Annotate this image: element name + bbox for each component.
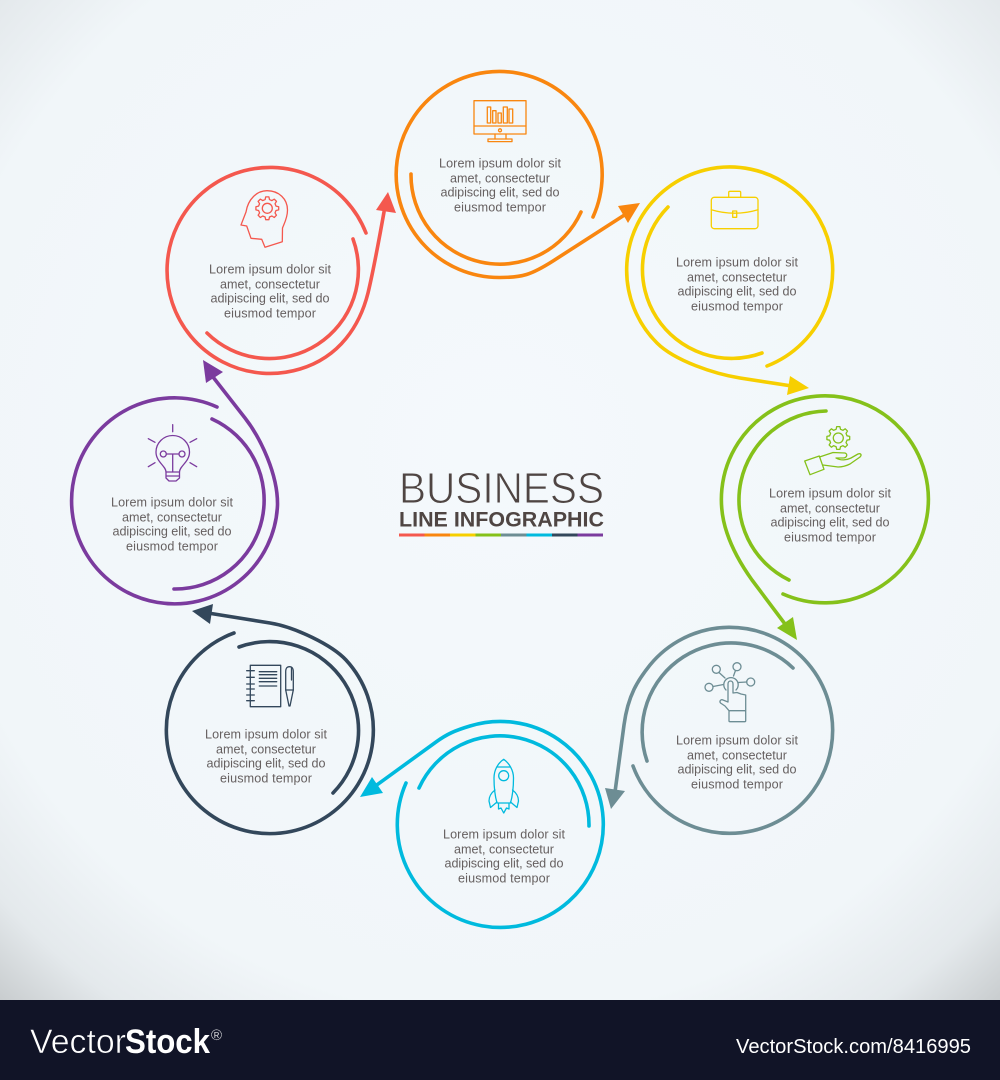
- subheading: LINE INFOGRAPHIC: [399, 508, 604, 532]
- text block: [209, 262, 332, 320]
- text block: amet, consectetur: [687, 270, 787, 284]
- circle and arrow line: [166, 613, 373, 834]
- text block: amet, consectetur: [122, 510, 222, 524]
- text block: [676, 256, 798, 314]
- arrow head: [192, 604, 213, 624]
- text block: Lorem ipsum dolor sit: [111, 496, 234, 510]
- text block: eiusmod tempor: [126, 540, 218, 554]
- arrow head: [787, 376, 809, 395]
- panel: red step: [167, 167, 396, 373]
- circle and arrow line: [615, 627, 833, 833]
- text block: [676, 734, 798, 792]
- text block: adipiscing elit, sed do: [440, 186, 560, 200]
- text block: eiusmod tempor: [220, 772, 312, 786]
- circle and arrow line: [721, 396, 928, 628]
- text block: amet, consectetur: [454, 842, 554, 856]
- text block: adipiscing elit, sed do: [112, 524, 232, 538]
- icon: head with gear: [241, 191, 288, 247]
- icon: touch network: [705, 663, 755, 722]
- inner arc: [739, 411, 826, 580]
- text block: eiusmod tempor: [784, 530, 876, 544]
- text block: adipiscing elit, sed do: [770, 516, 890, 530]
- panel: orange step: [396, 72, 640, 278]
- text block: amet, consectetur: [220, 278, 320, 292]
- text block: adipiscing elit, sed do: [206, 756, 326, 770]
- panel: green step: [721, 396, 928, 640]
- circle and arrow line: [167, 167, 384, 373]
- panel: cyan step: [360, 721, 603, 927]
- text block: adipiscing elit, sed do: [210, 292, 330, 306]
- icon: briefcase: [711, 191, 758, 229]
- url: VectorStock.com/8416995: [736, 1036, 971, 1058]
- text block: Lorem ipsum dolor sit: [769, 486, 892, 500]
- text block: Lorem ipsum dolor sit: [676, 734, 798, 748]
- text block: amet, consectetur: [450, 172, 550, 186]
- circle and arrow line: [396, 72, 626, 278]
- inner arc: [239, 642, 359, 793]
- text block: Lorem ipsum dolor sit: [676, 256, 798, 270]
- text block: Lorem ipsum dolor sit: [209, 262, 332, 276]
- inner arc: [642, 207, 762, 358]
- inner arc: [207, 239, 358, 359]
- arrow head: [777, 617, 797, 640]
- arrow head: [203, 360, 223, 383]
- text block: eiusmod tempor: [691, 778, 783, 792]
- text block: adipiscing elit, sed do: [444, 856, 564, 870]
- text block: eiusmod tempor: [691, 300, 783, 314]
- logo: Stock: [125, 1023, 210, 1061]
- arrow head: [605, 788, 625, 809]
- text block: adipiscing elit, sed do: [678, 284, 796, 298]
- arrow head: [376, 192, 396, 213]
- text block: [443, 828, 566, 886]
- icon: light bulb: [148, 425, 197, 481]
- heading: business: BUSINESS: [399, 464, 604, 513]
- text block: Lorem ipsum dolor sit: [443, 828, 566, 842]
- logo: [30, 1023, 222, 1061]
- circle and arrow line: [374, 721, 603, 927]
- text block: amet, consectetur: [780, 502, 880, 516]
- text block: [769, 486, 892, 544]
- arrow head: [360, 777, 383, 797]
- panel: purple step: [72, 360, 278, 604]
- inner arc: [419, 736, 589, 826]
- panel: yellow step: [627, 167, 833, 395]
- title: [399, 464, 604, 536]
- text block: eiusmod tempor: [224, 306, 316, 320]
- panel: navy step: [166, 604, 373, 834]
- text block: adipiscing elit, sed do: [678, 762, 796, 776]
- circle and arrow line: [627, 167, 833, 386]
- circle and arrow line: [72, 377, 278, 604]
- icon: gear in hand: [805, 427, 861, 475]
- inner arc: [642, 643, 793, 761]
- icon: rocket: [489, 759, 518, 813]
- icon: monitor: [474, 101, 526, 142]
- arrow head: [618, 203, 640, 223]
- text block: [111, 496, 234, 554]
- colour bar: [399, 534, 603, 536]
- icon: notebook and pen: [247, 665, 293, 707]
- logo: Vector: [30, 1023, 126, 1061]
- footer bar: [0, 1000, 1000, 1080]
- logo: ®: [211, 1027, 222, 1044]
- text block: amet, consectetur: [216, 742, 316, 756]
- inner arc: [174, 419, 264, 589]
- text block: eiusmod tempor: [458, 872, 550, 886]
- panel: slate step: [605, 627, 833, 833]
- text block: [439, 156, 562, 214]
- text block: Lorem ipsum dolor sit: [439, 156, 562, 170]
- text block: amet, consectetur: [687, 748, 787, 762]
- inner arc: [411, 174, 581, 264]
- text block: [205, 728, 328, 786]
- text block: Lorem ipsum dolor sit: [205, 728, 328, 742]
- text block: eiusmod tempor: [454, 200, 546, 214]
